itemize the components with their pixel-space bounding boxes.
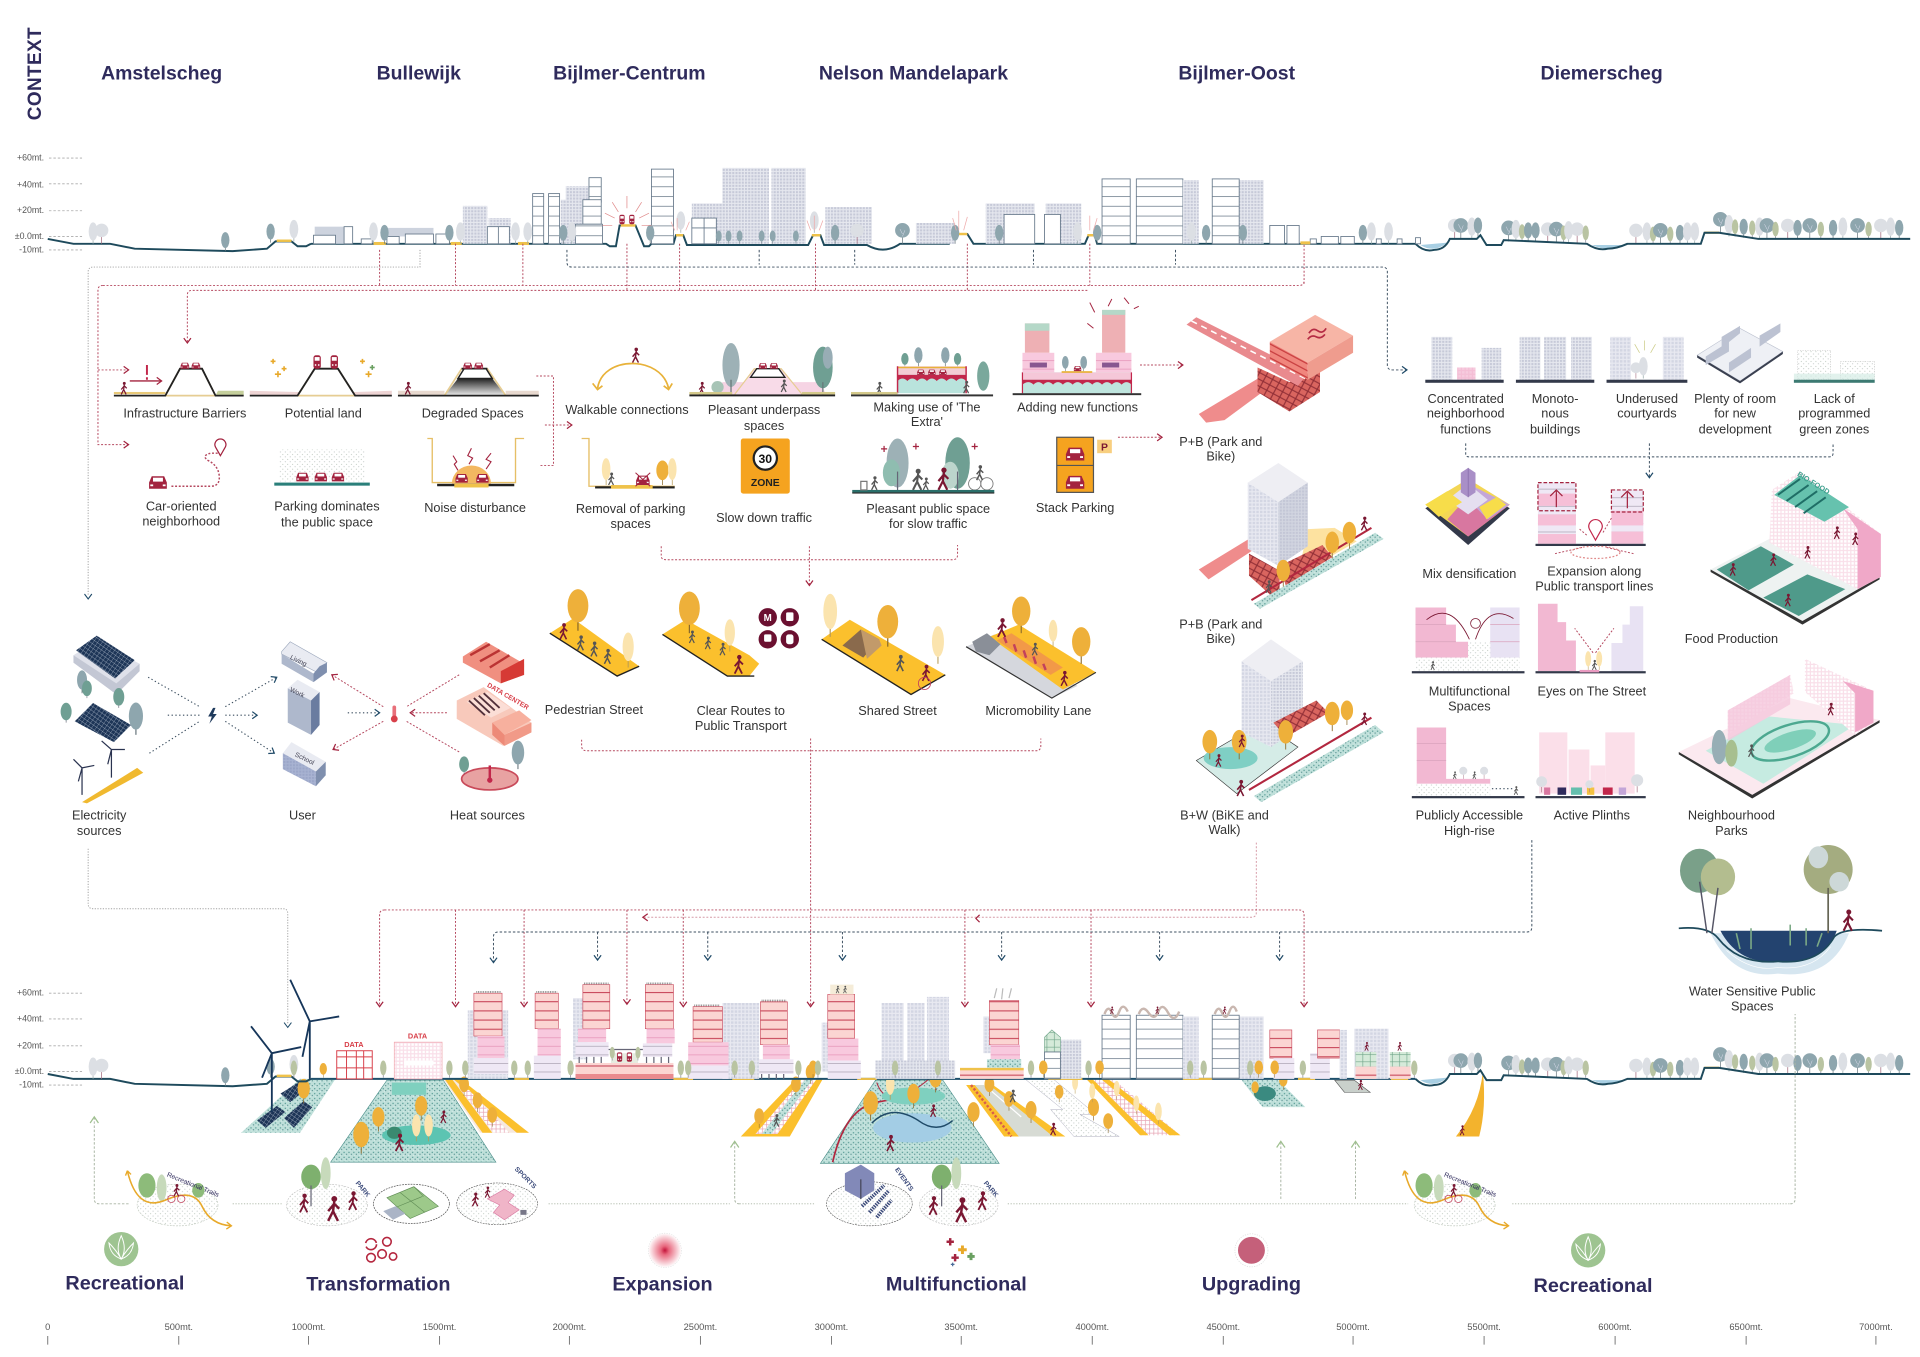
strategy: Multifunctional (886, 1238, 1027, 1296)
programme: Events: EVENTS (893, 1167, 915, 1193)
energy: electricity flow arrows (148, 677, 277, 753)
distance scale: 0 (45, 1322, 50, 1332)
distance scale: 500mt. (165, 1322, 193, 1332)
strategy: Slow down traffic, 30 zone sign: 30 (759, 452, 772, 466)
icons: public transport modes (759, 608, 799, 648)
mobility: B+W tower (1180, 639, 1384, 837)
section drawing: proposed transformation (48, 980, 1910, 1112)
strategy: Multifunctional Spaces: Multifunctional (1429, 684, 1510, 699)
strategy: Neighbourhood Parks: Neighbourhood (1688, 807, 1775, 822)
problem: Monotonous buildings (1516, 337, 1594, 437)
strategy: Removal of parking spaces (576, 438, 685, 531)
problem: Potential land: Potential land (285, 406, 362, 421)
energy: Electricity sources: Electricity (72, 807, 127, 822)
elevation axis: proposed section: +60mt. (17, 988, 44, 998)
mobility: P+B hub, elevated metro: P+B (Park and (1179, 434, 1262, 449)
strategy: Stack Parking (1036, 437, 1114, 515)
towers: Transformation towers (468, 983, 786, 1079)
elevation axis: proposed section: -10mt. (19, 1079, 44, 1089)
building: pale data centre: DATA (408, 1031, 428, 1040)
strategy: Stack Parking: P (1101, 443, 1108, 454)
elevation axis: top section: +60mt. (17, 153, 44, 163)
icons: public transport modes: M (764, 613, 772, 624)
strategy: Stack Parking: Stack Parking (1036, 500, 1114, 515)
strategy: Adding new functions (1013, 298, 1141, 415)
problem: Underused courtyards (1607, 337, 1687, 421)
mobility: B+W tower: B+W (BiKE and (1180, 807, 1269, 822)
problem: Potential land (250, 355, 392, 421)
problem: Lack of programmed green zones: programmed (1798, 406, 1870, 421)
distance scale: 1500mt. (423, 1322, 456, 1332)
problem: Plenty of room for new development (1694, 323, 1783, 437)
district headings: Amstelscheg (101, 63, 222, 85)
building: red data centre (337, 1040, 372, 1079)
elevation axis: proposed section (15, 988, 82, 1089)
problem: Infrastructure Barriers (114, 363, 246, 421)
distance scale: 4500mt. (1206, 1322, 1240, 1332)
strategy: Pleasant public space for slow traffic: Pleasant public space (866, 501, 990, 516)
street: Shared Street: Shared Street (858, 703, 937, 718)
strategy: Recreational west: Recreational (65, 1273, 184, 1295)
distance scale: 4000mt. (1075, 1322, 1109, 1332)
energy: Heat sources: DATA CENTER (486, 682, 530, 712)
connector: strategies to street types (661, 545, 958, 585)
strategy: Expansion: Expansion (612, 1274, 713, 1296)
energy: Electricity sources (61, 636, 143, 838)
problem: Concentrated neighborhood functions: functions (1440, 422, 1491, 437)
towers: Multifunctional centre (876, 988, 1024, 1079)
street: Pedestrian Street (545, 589, 643, 717)
problem: Underused courtyards: courtyards (1617, 406, 1677, 421)
street: Micromobility Lane (966, 596, 1096, 718)
strategy: Pleasant public space for slow traffic (852, 437, 994, 531)
strategy: Expansion along Public transport lines (1535, 483, 1653, 593)
distance scale: 6000mt. (1598, 1322, 1632, 1332)
strategy: Adding new functions: Adding new functions (1017, 400, 1138, 415)
strategy: Making use of The Extra: Making use of 'The (873, 400, 980, 415)
strategy: Removal of parking spaces: spaces (610, 516, 651, 531)
towers: Upgrading towers (1270, 1029, 1411, 1079)
strategy: Active Plinths: Active Plinths (1554, 807, 1630, 822)
problem: Concentrated neighborhood functions (1425, 337, 1505, 437)
programme: Tennis courts (373, 1184, 449, 1223)
strategy: Neighbourhood Parks: Parks (1715, 823, 1748, 838)
problem: Plenty of room for new development: for new (1714, 406, 1757, 421)
programme: Sports (457, 1166, 538, 1225)
strategy: Expansion (612, 1233, 713, 1296)
strategy: Eyes on The Street: Eyes on The Street (1538, 684, 1647, 699)
street: Clear Routes to Public Transport: Clear Routes to (697, 703, 785, 718)
elevation axis: proposed section: ±0.0mt. (15, 1066, 44, 1076)
strategy: Food Production (1685, 469, 1881, 646)
street trees along proposed section (291, 1061, 1417, 1078)
strategy: Recreational east (1534, 1233, 1653, 1297)
strategy: Walkable connections (565, 348, 689, 417)
programme: Recreational Trails east (1403, 1171, 1509, 1226)
mobility: P+B tower (1179, 463, 1384, 646)
problem: Infrastructure Barriers: Infrastructure Barriers (123, 406, 246, 421)
street: Pedestrian Street: Pedestrian Street (545, 702, 643, 717)
strategy: Pleasant underpass spaces (689, 343, 835, 433)
building: red data centre: DATA (344, 1040, 364, 1049)
strategy: Transformation (306, 1237, 451, 1296)
strategy: Slow down traffic, 30 zone sign: Slow down traffic (716, 510, 813, 525)
elevation axis: top section: +40mt. (17, 179, 44, 189)
strategy: Expansion along Public transport lines: Expansion along (1547, 564, 1641, 579)
problem: Monotonous buildings: buildings (1530, 422, 1580, 437)
strategy: Mix densification (1422, 468, 1516, 581)
problem: Monotonous buildings: nous (1541, 406, 1569, 421)
problem: Car-oriented neighborhood: Car-oriented (146, 499, 217, 514)
strategy: Food Production: Food Production (1685, 631, 1778, 646)
feedback lines from programmes to plans (94, 1014, 1795, 1204)
mobility: P+B tower: P+B (Park and (1179, 616, 1262, 631)
plan: street 4 (1025, 1075, 1119, 1136)
plan: Upgrading small plan (1335, 1080, 1370, 1092)
strategy: Mix densification: Mix densification (1422, 566, 1516, 581)
mobility: P+B hub, elevated metro: Bike) (1206, 449, 1235, 464)
elevation axis: top section: +20mt. (17, 205, 44, 215)
strategy: Upgrading: Upgrading (1202, 1274, 1301, 1296)
plan: street 3 (966, 1076, 1065, 1136)
problem: Car-oriented neighborhood: neighborhood (142, 513, 220, 528)
strategy: Slow down traffic, 30 zone sign: ZONE (751, 478, 780, 489)
plans: public space plans below proposed section (241, 1064, 1484, 1163)
energy: User buildings: User (289, 807, 317, 822)
distance scale: 6500mt. (1729, 1322, 1763, 1332)
strategy: Active Plinths (1536, 732, 1646, 822)
problem: Parking dominates the public space (274, 450, 380, 530)
connector: right problems bracket (1466, 443, 1833, 478)
street: Clear Routes to Public Transport: Public Transport (695, 718, 787, 733)
plan: street 5 (1086, 1079, 1180, 1135)
strategy: Food Production: BIO-FOOD (1796, 469, 1831, 496)
programme: Recreational Trails east: Recreational Trails (1443, 1172, 1498, 1199)
programme: Park 2: PARK (982, 1180, 999, 1199)
plan: Expansion street (741, 1064, 823, 1136)
energy: User buildings (282, 642, 327, 822)
problem: Plenty of room for new development: Plenty of room (1694, 391, 1776, 406)
energy: Heat sources (450, 642, 531, 822)
district headings: Diemerscheg (1541, 63, 1663, 85)
strategy: Publicly Accessible High-rise (1412, 727, 1524, 838)
strategy: Water Sensitive Public Spaces (1679, 845, 1882, 1013)
street: Shared Street (822, 594, 945, 718)
district headings: Bullewijk (377, 63, 461, 85)
strategy: Pleasant underpass spaces: Pleasant underpass (708, 402, 820, 417)
distance scale: 3500mt. (944, 1322, 978, 1332)
connector: problems to strategies (536, 365, 1183, 465)
strategy: Multifunctional Spaces (1412, 607, 1524, 713)
connector lines from context section to problems (84, 244, 1407, 599)
energy: Electricity sources: sources (77, 823, 121, 838)
problem: Lack of programmed green zones: green zones (1799, 422, 1869, 437)
strategy: Multifunctional Spaces: Spaces (1448, 698, 1491, 713)
problem: Car-oriented neighborhood (142, 439, 226, 528)
programme: Park (287, 1157, 371, 1226)
section drawing: existing context (48, 168, 1910, 251)
strategy: Multifunctional: Multifunctional (886, 1274, 1027, 1296)
street: Micromobility Lane: Micromobility Lane (985, 703, 1091, 718)
energy: User buildings: Work (288, 687, 306, 700)
elevation axis: proposed section: +20mt. (17, 1040, 44, 1050)
problem: Parking dominates the public space: Parking dominates (274, 499, 380, 514)
icon: thermometer (391, 705, 398, 722)
energy: User buildings: Living (289, 654, 308, 668)
elevation axis: top section (15, 153, 82, 254)
problem: Degraded Spaces: Degraded Spaces (422, 406, 524, 421)
strategy: Eyes on The Street (1536, 604, 1647, 699)
strategy: Recreational east: Recreational (1534, 1275, 1653, 1297)
elevation axis: proposed section: +40mt. (17, 1013, 44, 1023)
strategy: Pleasant underpass spaces: spaces (744, 418, 784, 433)
strategy: Upgrading (1202, 1234, 1301, 1296)
icon: train with noise rays (602, 196, 1097, 230)
distance scale: 5500mt. (1467, 1322, 1501, 1332)
strategy: Removal of parking spaces: Removal of parking (576, 501, 685, 516)
elevation axis: top section: ±0.0mt. (15, 231, 44, 241)
programme: Recreational Trails west (126, 1171, 231, 1226)
programme: Events (827, 1165, 915, 1226)
problem: Monotonous buildings: Monoto- (1532, 391, 1578, 406)
problem: Noise disturbance: Noise disturbance (424, 500, 526, 515)
programme: Recreational Trails west: Recreational Trails (166, 1172, 221, 1199)
distance scale (45, 1322, 1893, 1345)
problem: Lack of programmed green zones (1794, 350, 1875, 437)
distance scale: 3000mt. (815, 1322, 848, 1332)
strategy: Making use of The Extra (851, 347, 993, 429)
strategy: Recreational west (65, 1232, 184, 1295)
strategy: Expansion along Public transport lines: Public transport lines (1535, 578, 1653, 593)
icon: lightning bolt (208, 708, 217, 724)
strategy: Publicly Accessible High-rise: Publicly Accessible (1416, 807, 1523, 822)
mobility: P+B hub, elevated metro (1179, 315, 1353, 464)
buildings: Greenhouse and upgraded slabs (1044, 1007, 1264, 1079)
strategy: Water Sensitive Public Spaces: Water Sensitive Public (1689, 984, 1816, 999)
energy: User buildings: School (294, 752, 316, 767)
problem: Plenty of room for new development: development (1699, 422, 1772, 437)
distance scale: 1000mt. (292, 1322, 325, 1332)
energy: Heat sources: Heat sources (450, 807, 525, 822)
plan: Multifunctional park with pond (820, 1068, 999, 1163)
distance scale: 5000mt. (1336, 1322, 1370, 1332)
plan: street 1 (443, 1076, 529, 1133)
problem: Degraded Spaces (398, 363, 539, 421)
district headings: Nelson Mandelapark (819, 63, 1008, 85)
problem: Noise disturbance (424, 438, 526, 515)
plan: Upgrading courtyard (1242, 1073, 1305, 1107)
title: CONTEXT: CONTEXT (25, 27, 46, 120)
distance scale: 7000mt. (1859, 1322, 1893, 1332)
programme: Park 2 (920, 1157, 999, 1226)
problem: Concentrated neighborhood functions: Concentrated (1428, 391, 1504, 406)
mobility: B+W tower: Walk) (1208, 822, 1241, 837)
strategy: Water Sensitive Public Spaces: Spaces (1731, 998, 1773, 1013)
elevation axis: top section: -10mt. (19, 244, 44, 254)
strategy: Neighbourhood Parks (1679, 659, 1880, 838)
icon: wind turbines (251, 980, 339, 1112)
building: pale data centre (394, 1032, 442, 1079)
district headings: Bijlmer-Oost (1178, 63, 1296, 85)
plan: solar park (241, 1079, 336, 1133)
distance scale: 2000mt. (553, 1322, 586, 1332)
strategy: Walkable connections: Walkable connections (565, 402, 689, 417)
district headings (101, 63, 1663, 85)
strategy: Slow down traffic, 30 zone sign (716, 438, 813, 525)
programme: Park: PARK (354, 1180, 371, 1199)
connectors: strategies to proposed section (88, 738, 1532, 1027)
street: Clear Routes to Public Transport (662, 592, 799, 733)
problem: Lack of programmed green zones: Lack of (1814, 391, 1855, 406)
strategy: Making use of The Extra: Extra' (911, 414, 943, 429)
mobility: P+B tower: Bike) (1206, 631, 1235, 646)
towers: Expansion towers (688, 985, 861, 1079)
strategy: Publicly Accessible High-rise: High-rise (1444, 823, 1495, 838)
problem: Concentrated neighborhood functions: neighborhood (1427, 406, 1505, 421)
distance scale: 2500mt. (684, 1322, 717, 1332)
strategy: Transformation: Transformation (306, 1274, 451, 1296)
connector: B+W to bottom section (643, 843, 1256, 917)
programme: Sports: SPORTS (513, 1166, 538, 1191)
problem: Parking dominates the public space: the public space (281, 515, 373, 530)
district headings: Bijlmer-Centrum (553, 63, 706, 85)
problem: Underused courtyards: Underused (1616, 391, 1678, 406)
plan: park Transformation (331, 1080, 496, 1162)
strategy: Pleasant public space for slow traffic: for slow traffic (889, 516, 968, 531)
energy: heat flow arrows (332, 675, 459, 752)
plan: recreational trail ramp (1456, 1072, 1484, 1136)
